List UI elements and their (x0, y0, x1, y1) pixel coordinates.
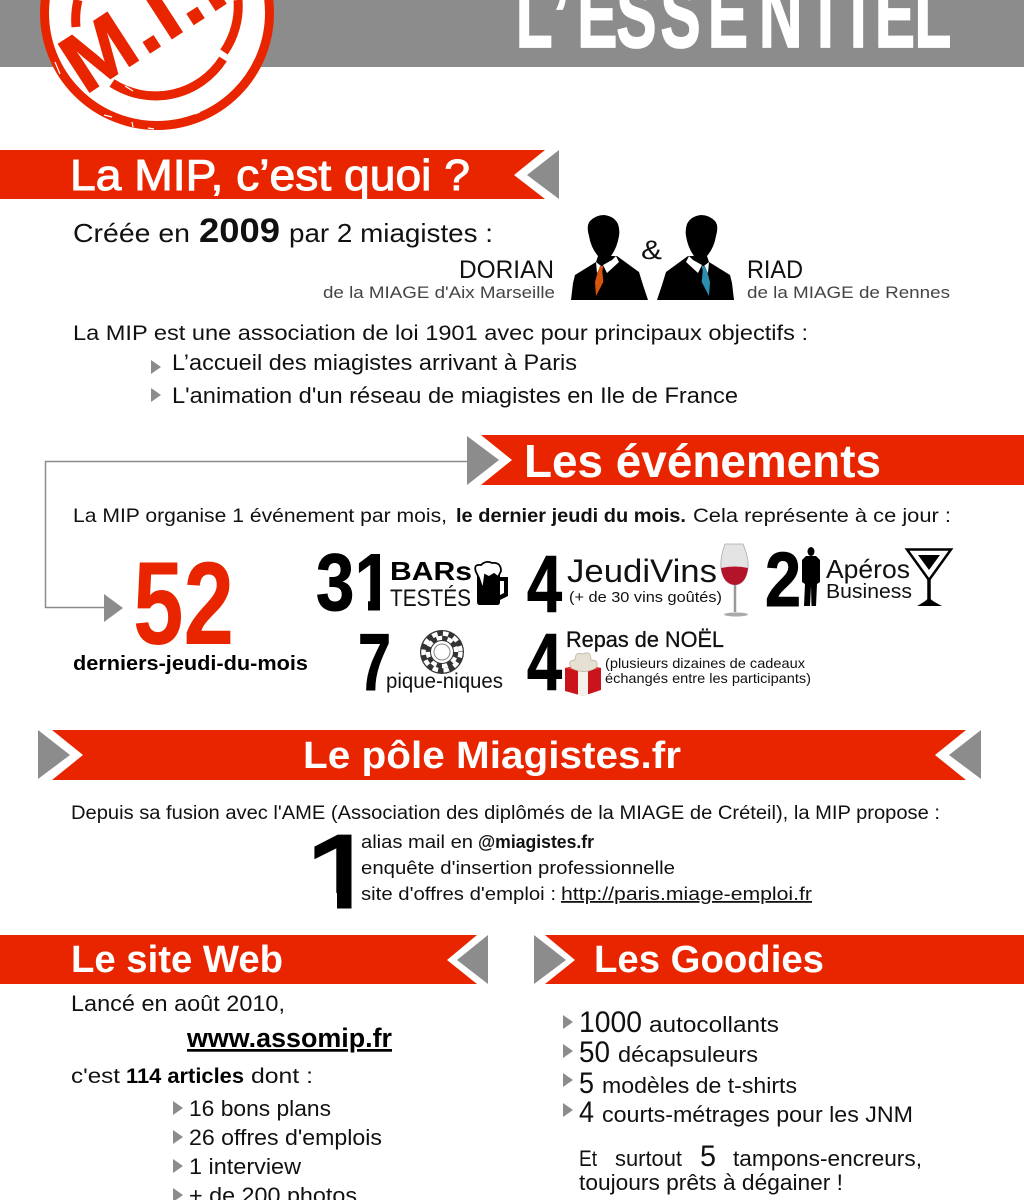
stat: 31 bars: BARs (390, 556, 472, 586)
list: objectives: L'animation d'un réseau de miagistes en Ile de France (172, 383, 738, 408)
stat: 4 JeudiVins: JeudiVins (567, 553, 717, 589)
stat: 7 pique-niques: pique-niques (386, 670, 503, 693)
icon: beer mug (475, 562, 508, 605)
arrow: connector to 52 (46, 462, 467, 622)
icon: martini glass (907, 550, 951, 606)
panel: Le site Web (0, 935, 488, 1200)
text: articles count: c'est (71, 1065, 120, 1088)
stat: 2 Apéros Business: 2 (765, 537, 801, 623)
stat: 4 JeudiVins (527, 540, 722, 630)
list: services: alias mail en (361, 832, 473, 852)
text: objectives intro: La MIP est une association de loi 1901 avec pour principaux objectifs : (73, 322, 808, 345)
list: goodies: courts-métrages pour les JNM (602, 1102, 913, 1127)
banner: Les Goodies (534, 935, 1024, 984)
icon: gift box (565, 653, 601, 696)
stat: 31 bars: 31 (316, 537, 393, 627)
panel: Les Goodies (534, 935, 1024, 1195)
text: stamps note: tampons-encreurs, (733, 1146, 922, 1171)
stat: 4 repas de Noël (527, 618, 811, 708)
list: articles: 26 offres d'emplois (189, 1125, 382, 1150)
stat: 4 JeudiVins: 4 (527, 540, 562, 630)
list: services: enquête d'insertion professionnelle (361, 858, 675, 878)
stat: 31 bars (317, 553, 471, 612)
list: goodies: 50 (579, 1036, 610, 1069)
stat: 52: 52 (133, 538, 234, 670)
text: Riad (747, 256, 950, 302)
stat: 7 pique-niques: 7 (358, 618, 391, 708)
list: objectives (151, 350, 738, 408)
banner: Les Goodies: Les Goodies (594, 939, 824, 981)
text: launch date: Lancé en août 2010, (71, 991, 285, 1016)
icon: checkered plate (420, 630, 464, 674)
stat: 4 repas de Noël: Repas de NOËL (566, 627, 724, 652)
banner: Les événements (467, 435, 1024, 487)
list: services (361, 832, 812, 904)
panel: Le pôle Miagistes.fr (38, 730, 981, 908)
header band (0, 0, 1024, 67)
text: Dorian: de la MIAGE d'Aix Marseille (323, 283, 555, 302)
text: stamps note: toujours prêts à dégainer ! (579, 1170, 843, 1195)
text: ampersand: & (641, 235, 662, 265)
banner: Le pôle Miagistes.fr (38, 730, 981, 780)
list: goodies: décapsuleurs (618, 1042, 758, 1067)
banner: Le pôle Miagistes.fr: Le pôle Miagistes.fr (303, 735, 681, 777)
text: stamps note: Et (579, 1146, 597, 1171)
text: articles count: dont : (251, 1065, 313, 1088)
text: merger intro: Depuis sa fusion avec l'AME (Association des diplômés de la MIAGE de Créteil), la MIP propose : (71, 803, 940, 824)
stat: 31 bars: TESTÉS (390, 585, 471, 612)
stat: 2 Apéros Business: Apéros (826, 554, 910, 584)
text: articles count: 114 articles (126, 1065, 244, 1088)
stat: 4 repas de Noël: (plusieurs dizaines de cadeaux (605, 655, 805, 671)
stat: 1: 1 (306, 813, 380, 931)
list: articles (173, 1096, 382, 1200)
text: stamps note (579, 1140, 922, 1195)
icon: silhouette Riad (657, 215, 734, 300)
text: events intro: Cela représente à ce jour : (693, 505, 951, 527)
stat: 7 pique-niques (358, 618, 503, 708)
list: goodies: autocollants (649, 1012, 779, 1037)
stat: 4 JeudiVins: (+ de 30 vins goûtés) (569, 589, 722, 606)
text: events intro: La MIP organise 1 événement par mois, (73, 505, 447, 527)
text: Dorian: DORIAN (459, 256, 554, 284)
list: articles: 16 bons plans (189, 1096, 331, 1121)
text: stamps note: 5 (700, 1140, 716, 1173)
text: events intro: le dernier jeudi du mois. (456, 505, 686, 527)
list: services: site d'offres d'emploi : (361, 884, 556, 904)
banner: La MIP, c'est quoi: La MIP, c’est quoi ? (70, 151, 470, 200)
icon: silhouette Dorian (571, 215, 648, 300)
list: goodies: modèles de t-shirts (602, 1073, 797, 1098)
list: services: @miagistes.fr (478, 832, 594, 852)
stat: 4 repas de Noël: échangés entre les participants) (605, 670, 811, 686)
text: creation date: Créée en (73, 218, 190, 248)
text: events intro (73, 505, 951, 527)
stat: 2 Apéros Business (765, 537, 912, 623)
text: creation date (73, 212, 493, 250)
stat: 52 (73, 538, 308, 675)
panel: La MIP, c'est quoi (0, 150, 950, 408)
text: stamps note: surtout (615, 1146, 682, 1171)
list: articles: 1 interview (189, 1154, 301, 1179)
stat: 2 Apéros Business: Business (826, 581, 912, 603)
banner: Les événements: Les événements (524, 435, 881, 487)
banner: Le site Web (0, 935, 488, 984)
list: services: http://paris.miage-emploi.fr (561, 884, 812, 904)
list: goodies (563, 1006, 913, 1129)
banner: La MIP, c'est quoi (0, 150, 559, 200)
banner: Le site Web: Le site Web (71, 939, 283, 981)
text: website URL: www.assomip.fr (186, 1023, 392, 1053)
list: goodies: 4 (579, 1096, 594, 1129)
text: Dorian (323, 256, 555, 302)
panel: Les événements (46, 435, 1024, 708)
text: articles count (71, 1065, 313, 1088)
text: creation date: par 2 miagistes : (289, 218, 493, 248)
stat: 4 repas de Noël: 4 (527, 618, 562, 708)
list: objectives: L’accueil des miagistes arrivant à Paris (172, 350, 577, 375)
stat: 52: derniers-jeudi-du-mois (73, 653, 308, 675)
list: goodies: 5 (579, 1067, 594, 1100)
list: goodies: 1000 (579, 1006, 642, 1039)
text: Riad: RIAD (747, 256, 803, 284)
text: creation date: 2009 (199, 212, 280, 250)
icon: wine glass (721, 544, 748, 616)
text: Riad: de la MIAGE de Rennes (747, 283, 950, 302)
icon: businessman (802, 547, 820, 606)
